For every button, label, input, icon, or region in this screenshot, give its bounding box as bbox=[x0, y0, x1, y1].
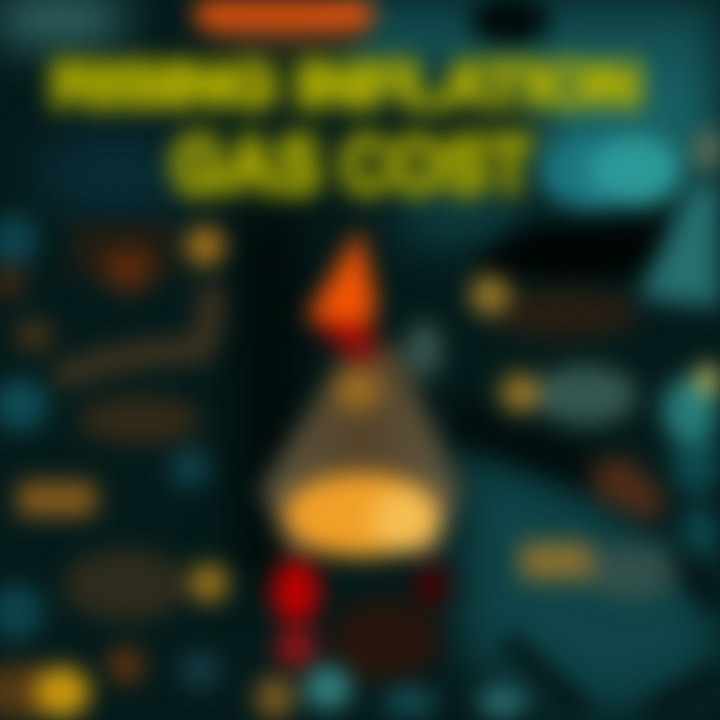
teal blob right of title bbox=[540, 134, 681, 210]
label text bbox=[584, 544, 680, 600]
item 1 bullet bbox=[470, 275, 510, 315]
item 2 text bbox=[533, 365, 637, 425]
right panel: cost items bbox=[450, 128, 720, 715]
bottom markers bbox=[255, 666, 526, 720]
dark diagonal lower bbox=[505, 555, 720, 715]
teal panels right bbox=[640, 128, 720, 565]
item 4 bullet bbox=[189, 563, 229, 603]
dark band bbox=[450, 395, 640, 500]
centre illustration: gas pump flame bbox=[255, 228, 526, 720]
bottom left yellow blob bbox=[0, 664, 90, 720]
top orange shape bbox=[196, 0, 372, 48]
item 4 text bbox=[63, 549, 187, 621]
item 1 text bbox=[55, 285, 211, 378]
title bbox=[51, 51, 641, 209]
item 1 icon bbox=[72, 224, 172, 292]
title: GAS COST bbox=[172, 120, 532, 209]
dark spot top right bbox=[470, 0, 550, 44]
small markers bbox=[0, 214, 220, 688]
item 2 bullet bbox=[500, 373, 540, 413]
base bbox=[329, 598, 441, 682]
red stand bbox=[272, 560, 450, 666]
yellow label bbox=[520, 542, 592, 580]
left panel: cost items bbox=[0, 214, 229, 720]
flame base bbox=[334, 370, 382, 410]
flame bbox=[306, 228, 376, 362]
item 1 bullet bbox=[185, 226, 225, 266]
grey highlight bbox=[406, 322, 442, 378]
title: RISING INFLATION bbox=[51, 51, 641, 120]
flask body bbox=[260, 345, 462, 555]
brown tag bbox=[590, 458, 668, 522]
item 1 text bbox=[491, 288, 639, 340]
black shape top bbox=[475, 222, 668, 280]
item 2 text bbox=[78, 396, 202, 444]
glowing liquid bbox=[284, 473, 440, 557]
item 3 label bbox=[18, 482, 96, 516]
